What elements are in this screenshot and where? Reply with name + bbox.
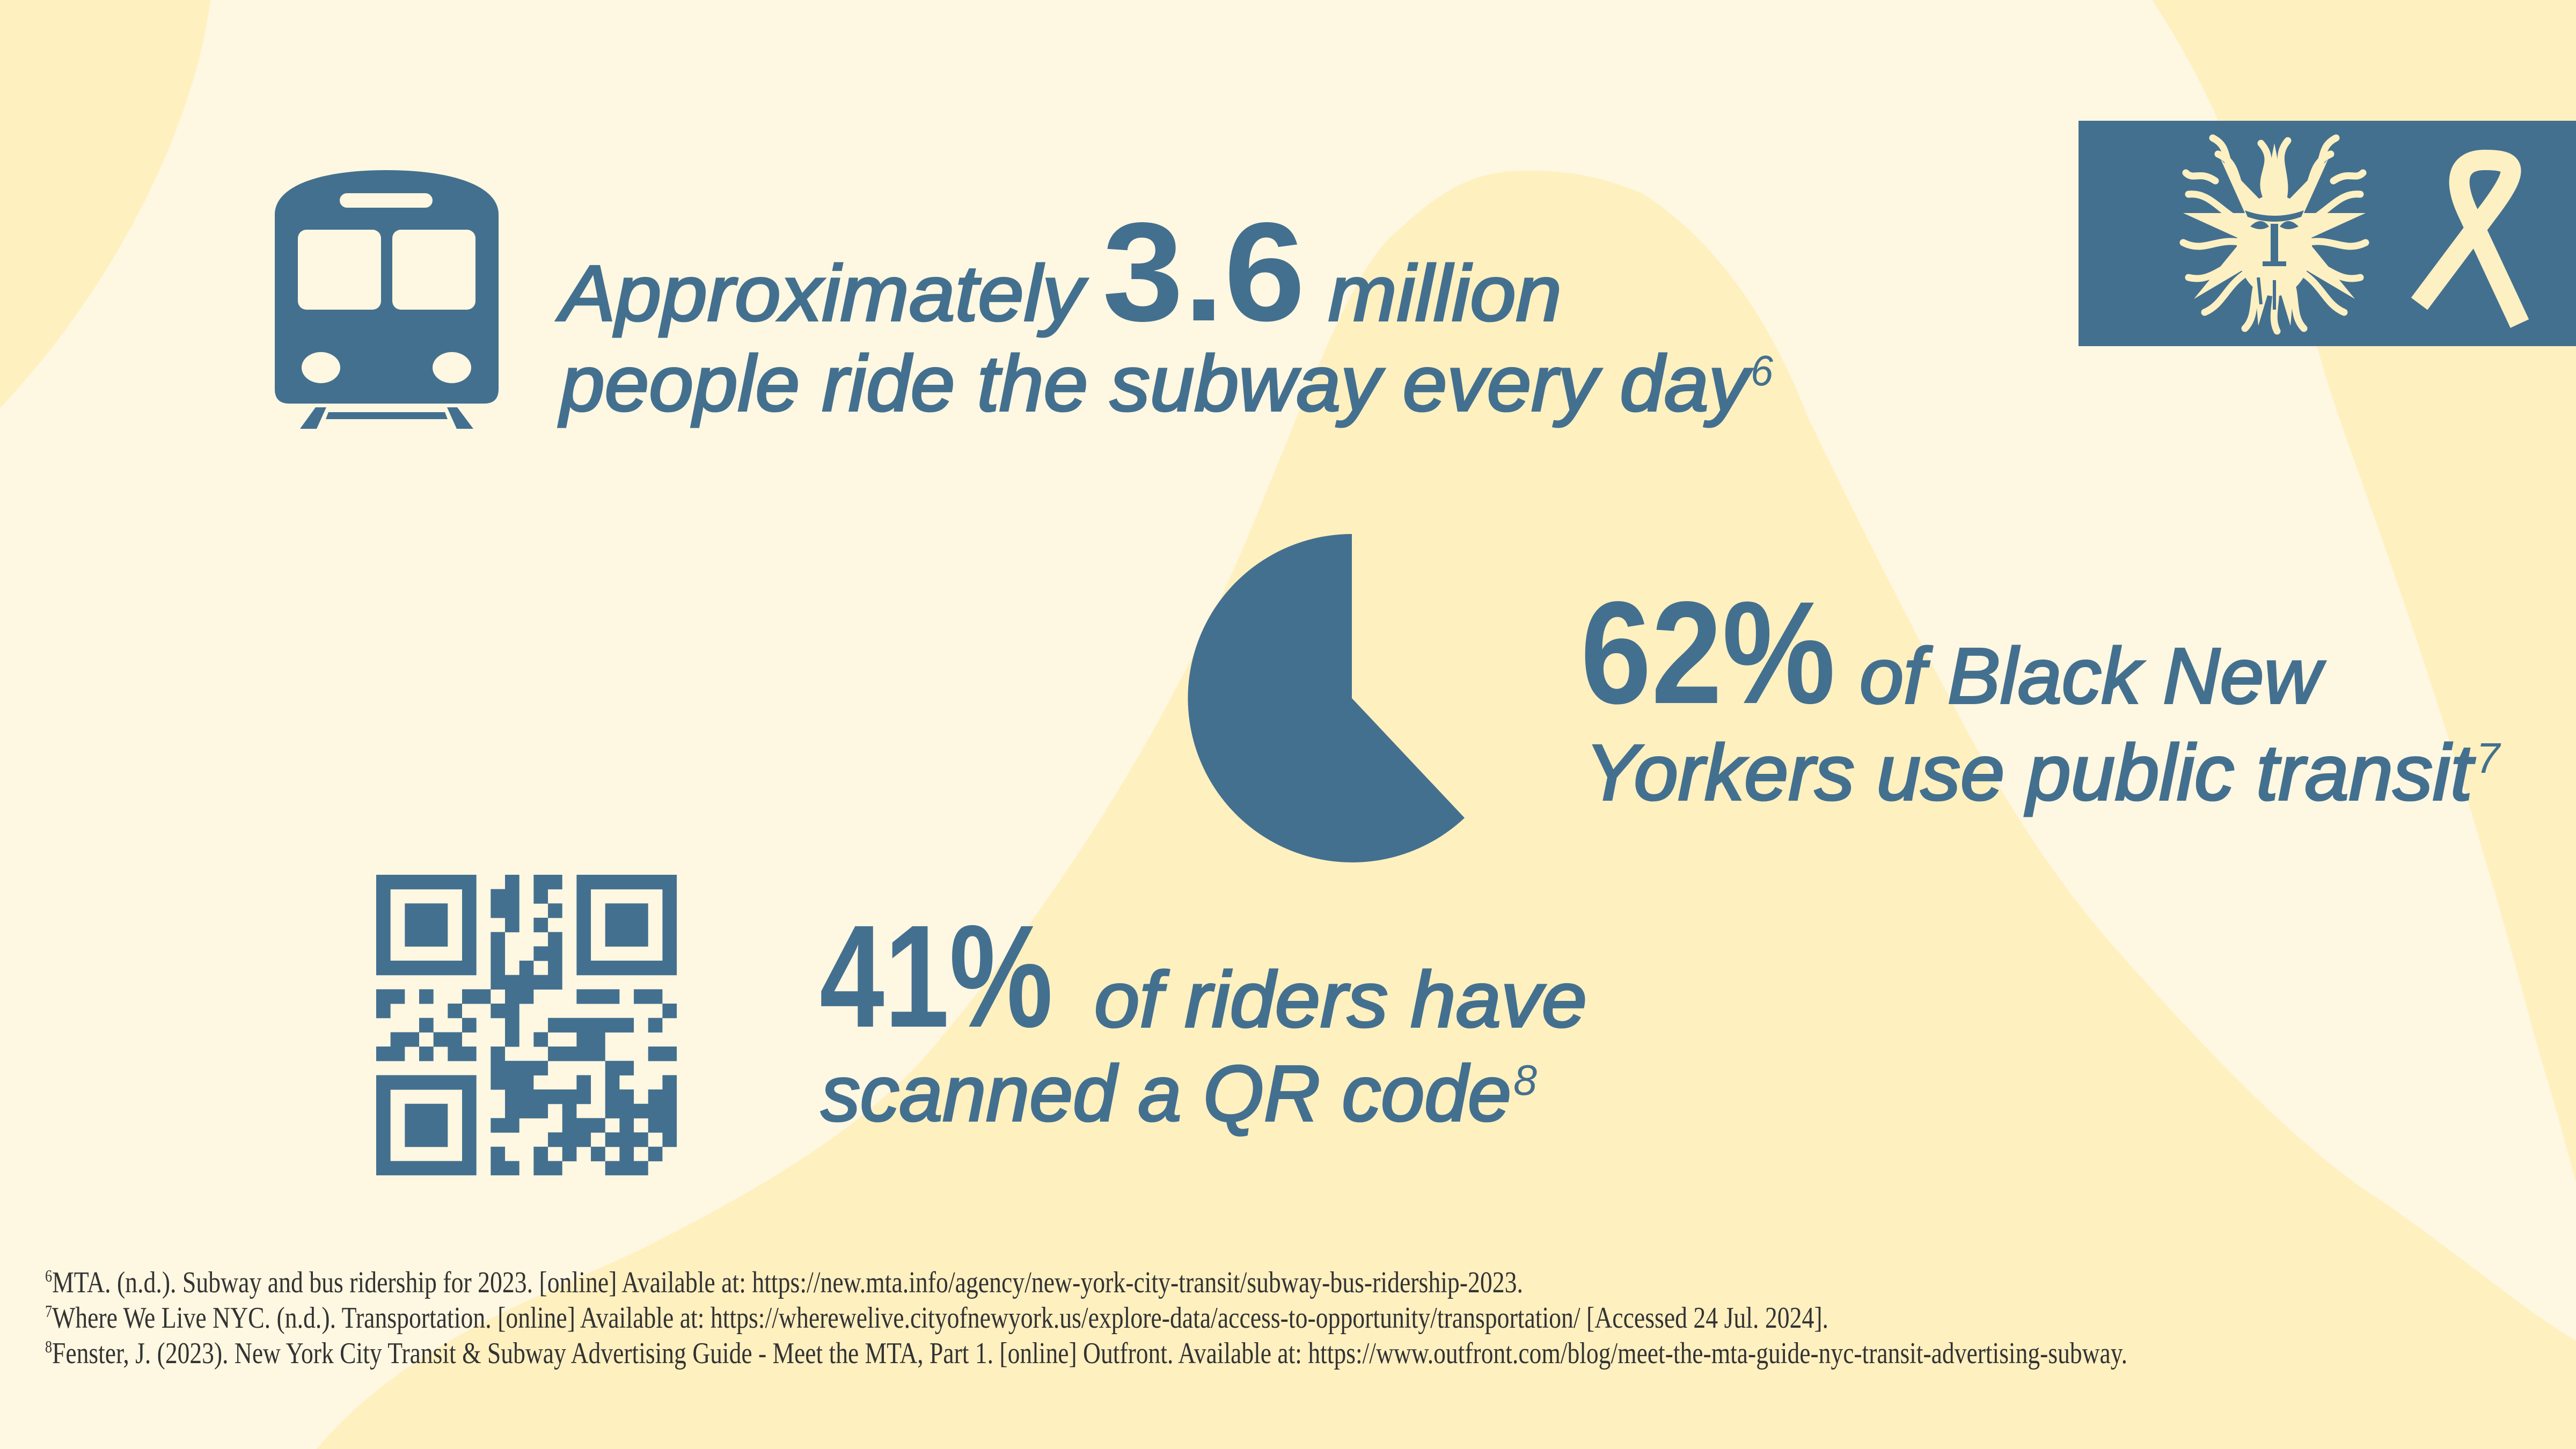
footnotes: 8 (45, 1337, 52, 1356)
footnotes: Fenster, J. (2023). New York City Transit & Subway Advertising Guide - Meet the MTA, Part 1. [online] Outfront. Available at: https://www.outfront.com/blog/meet-the-mta-guide-nyc-transit-advertising-subway. (52, 1337, 2127, 1370)
text block: 62% Black New Yorkers: 7 (2476, 734, 2501, 782)
text block: subway ridership: people ride the subway every day (558, 340, 1753, 428)
icon: lion sun logo (2183, 138, 2366, 331)
text block: 62% Black New Yorkers (1580, 571, 2501, 817)
footnotes: 6 (45, 1266, 52, 1285)
text block: 41% QR code: 41% (819, 895, 1053, 1058)
text block: 41% QR code (819, 895, 1587, 1138)
text block: subway ridership: million (1328, 250, 1562, 338)
footnotes: MTA. (n.d.). Subway and bus ridership for 2023. [online] Available at: https://new.mta.info/agency/new-york-city-transit/subway-bus-ridership-2023. (52, 1266, 1523, 1299)
icon: QR code (376, 875, 677, 1175)
text block: 41% QR code: 8 (1513, 1056, 1537, 1104)
text block: 62% Black New Yorkers: 62% (1580, 571, 1835, 734)
text block: subway ridership: 3.6 (1102, 193, 1305, 350)
text block: 62% Black New Yorkers: of Black New (1860, 632, 2326, 720)
icon: subway train (275, 170, 499, 429)
text block: 41% QR code: of riders have (1094, 956, 1587, 1044)
text block: subway ridership (556, 193, 1773, 428)
chart: pie 62% (1188, 534, 1465, 862)
text block: 62% Black New Yorkers: Yorkers use public transit (1585, 729, 2475, 817)
text block: subway ridership: 6 (1751, 347, 1773, 394)
logo panel (2079, 121, 2576, 346)
footnotes: Where We Live NYC. (n.d.). Transportation. [online] Available at: https://wherewelive.cityofnewyork.us/explore-data/access-to-opportunity/transportation/ [Accessed 24 Jul. 2024]. (52, 1301, 1828, 1335)
footnotes (45, 1266, 2127, 1370)
text block: subway ridership: Approximately (556, 250, 1088, 338)
text block: 41% QR code: scanned a QR code (821, 1050, 1511, 1138)
footnotes: 7 (45, 1301, 52, 1321)
icon: awareness ribbon (2419, 160, 2520, 324)
